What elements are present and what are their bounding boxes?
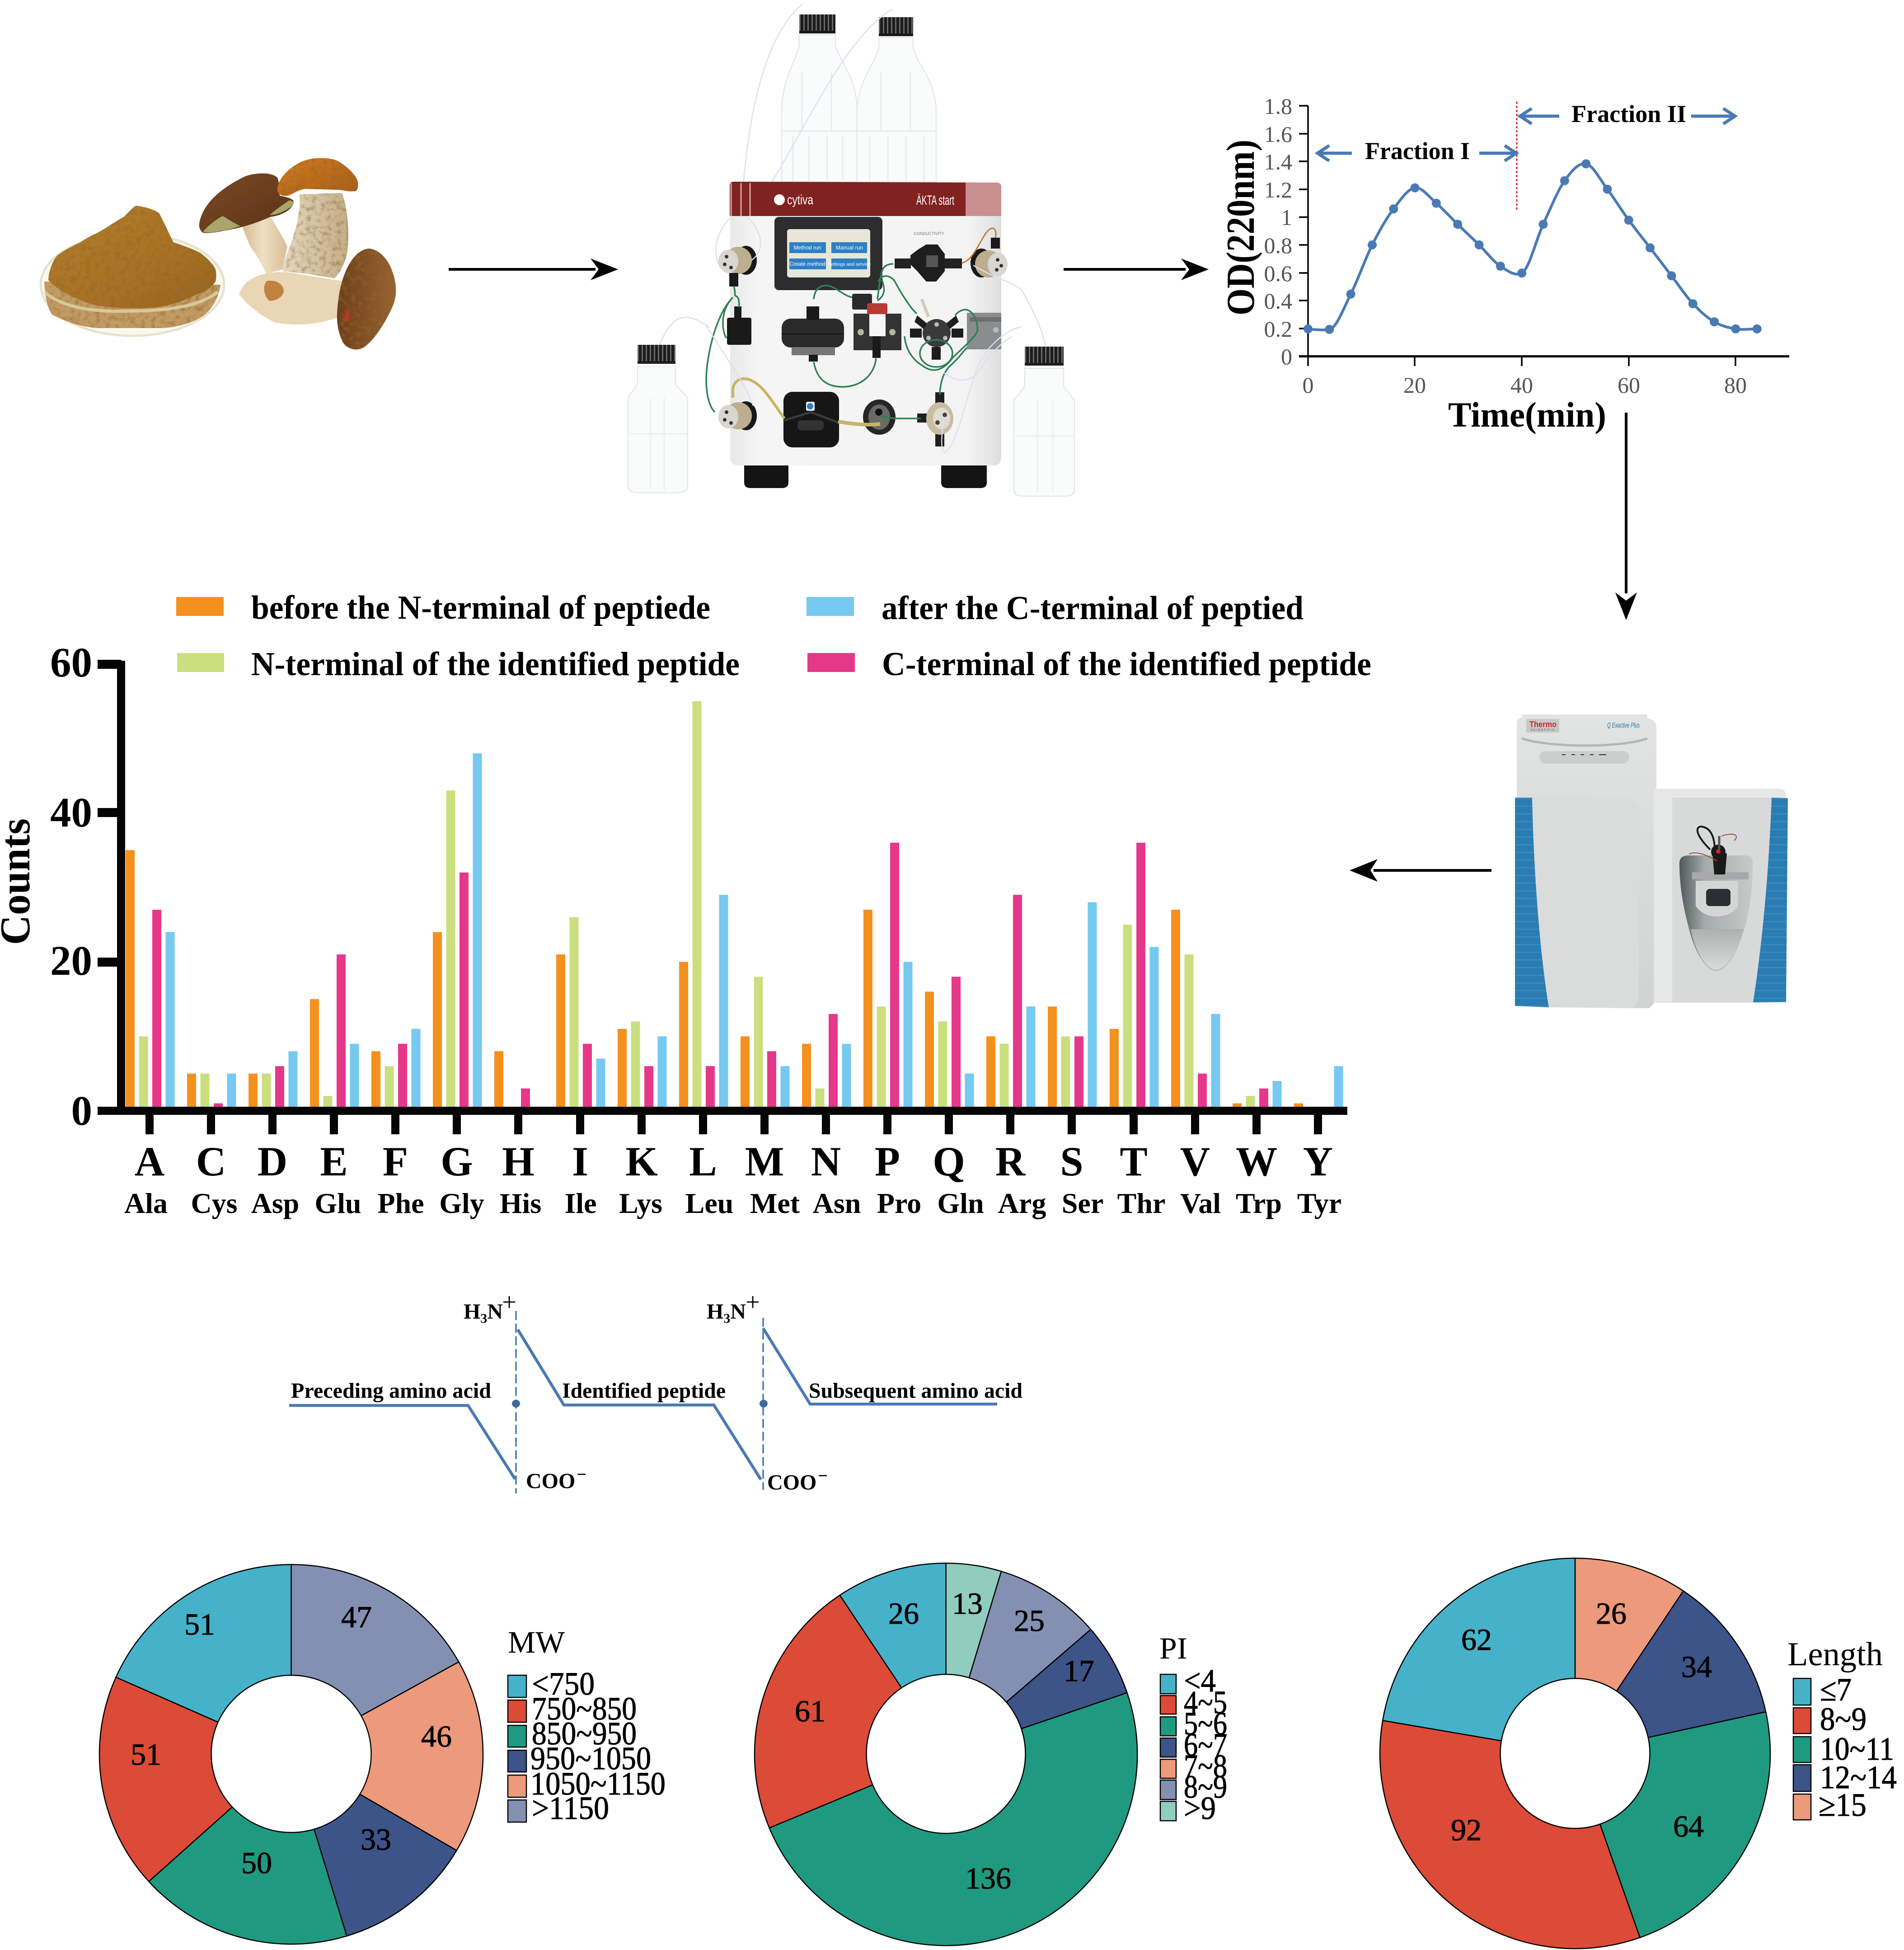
bars T — [1110, 843, 1158, 1111]
y-axis tick labels: 0.8 — [1264, 233, 1292, 258]
amino acid one-letter codes: P — [875, 1138, 900, 1184]
red speck — [344, 311, 350, 322]
valve: bottom left — [718, 401, 757, 430]
legend: after the C-terminal: after the C-terminal of peptied — [882, 590, 1304, 627]
legend text PI — [1184, 1663, 1227, 1826]
curve data points — [1304, 159, 1762, 334]
amino acid one-letter codes: Q — [933, 1138, 965, 1184]
right blue panel — [1753, 798, 1788, 1002]
legend title PI: PI — [1159, 1631, 1187, 1665]
amino acid one-letter codes: L — [689, 1138, 717, 1184]
legend text Length — [1819, 1672, 1897, 1823]
arrow: chromatography to elution profile — [1064, 258, 1209, 280]
foot right — [941, 465, 987, 488]
y-axis tick labels: 0 — [1281, 344, 1292, 369]
elution curve — [1308, 164, 1757, 330]
conductivity cell — [895, 231, 962, 282]
donut hole — [211, 1675, 371, 1833]
x-axis tick labels: 80 — [1724, 372, 1747, 398]
amino acid one-letter codes: H — [502, 1138, 535, 1184]
Length value labels: 92 — [1451, 1813, 1482, 1847]
y-axis tick labels: 1.6 — [1264, 122, 1292, 147]
bars P — [863, 843, 913, 1111]
fraction II arrows — [1520, 108, 1735, 124]
y-axis tick labels: 20 — [50, 938, 92, 984]
photo: mushroom powder in a dish — [41, 206, 224, 336]
chart: amino acid counts bars — [0, 639, 1347, 1219]
label: H3N+ left — [464, 1288, 516, 1326]
Length value labels: 26 — [1596, 1596, 1627, 1630]
y-axis tick labels: 1.2 — [1264, 177, 1292, 202]
amino acid three-letter codes: Lys — [619, 1187, 662, 1219]
MW value labels: 33 — [361, 1822, 391, 1856]
amino acid three-letter codes: Leu — [685, 1187, 733, 1219]
y-axis tick labels: 1.4 — [1264, 149, 1292, 174]
slice 26 — [1575, 1558, 1684, 1753]
legend: N-terminal of identified: N-terminal of the identified peptide — [251, 646, 740, 683]
PI value labels: 13 — [952, 1586, 983, 1621]
label: COO- right: − — [818, 1466, 828, 1485]
legend title Length: Length — [1787, 1636, 1883, 1673]
cleavage point left — [512, 1400, 520, 1407]
label: COO- right: COO — [767, 1471, 816, 1494]
status bar — [1539, 751, 1629, 764]
slice 46 — [291, 1662, 483, 1851]
legend text MW — [530, 1666, 666, 1826]
fraction I label: Fraction I — [1365, 137, 1470, 164]
amino acid one-letter codes: S — [1060, 1138, 1083, 1184]
legend swatches PI — [1160, 1674, 1176, 1821]
MW value labels: 50 — [241, 1846, 272, 1880]
legend text Length: 10~11 — [1820, 1731, 1894, 1767]
x-axis tick labels: 60 — [1618, 372, 1640, 398]
x-axis tick labels: 0 — [1302, 372, 1314, 398]
valve: top right — [971, 238, 1008, 277]
legend text PI: 6~7 — [1184, 1727, 1227, 1763]
pressure sensor — [863, 399, 896, 435]
legend text MW: <750 — [532, 1666, 595, 1702]
amino acid one-letter codes: T — [1120, 1138, 1148, 1184]
PI value labels: 61 — [795, 1694, 825, 1728]
legend text MW: >1150 — [532, 1790, 609, 1826]
amino acid three-letter codes: Gly — [439, 1187, 484, 1219]
valve: top left — [718, 246, 757, 287]
amino acid one-letter codes: N — [811, 1138, 841, 1184]
PI value labels: 25 — [1014, 1603, 1045, 1638]
label: COO- left: − — [577, 1465, 586, 1484]
bars Y — [1294, 1066, 1343, 1111]
model name: Q Exactive Plus — [1607, 722, 1640, 729]
fraction I arrows — [1318, 146, 1516, 161]
amino acid three-letter codes: Trp — [1236, 1187, 1282, 1219]
bars W — [1233, 1081, 1281, 1111]
label: H3N+ right — [707, 1288, 760, 1326]
cap underside: left mushroom — [203, 200, 294, 232]
red top band: ÄKTA start — [916, 193, 954, 208]
label: H3N+ right: N — [730, 1300, 746, 1324]
bars F — [371, 1029, 420, 1111]
left front panel — [1532, 798, 1639, 1008]
donut chart: Length — [1380, 1558, 1770, 1949]
conductivity cell: CONDUCTIVITY — [914, 231, 944, 236]
PI value labels: 26 — [888, 1596, 919, 1630]
y-axis tick labels: 40 — [50, 789, 92, 836]
legend text MW: 950~1050 — [530, 1740, 651, 1776]
bars V — [1171, 910, 1220, 1111]
amino acid three-letter codes: Arg — [998, 1187, 1046, 1219]
legend text MW: 750~850 — [532, 1691, 637, 1727]
red top band: cytiva — [787, 193, 813, 207]
ion source module — [1689, 827, 1749, 916]
PI value labels — [795, 1586, 1094, 1895]
slice 25 — [946, 1571, 1091, 1754]
y-axis tick labels: 0.2 — [1264, 316, 1292, 342]
y-axis tick labels: 1 — [1281, 205, 1292, 230]
left tower — [1515, 714, 1656, 1008]
slice 61 — [755, 1595, 946, 1828]
amino acid three-letter codes: Ala — [124, 1187, 168, 1219]
x-axis tick labels: 20 — [1403, 372, 1426, 398]
amino acid one-letter codes: F — [383, 1138, 408, 1184]
label: H3N+ right: H — [707, 1300, 723, 1324]
legend swatches MW — [508, 1675, 526, 1822]
legend: C-terminal of identified: C-terminal of the identified peptide — [882, 646, 1371, 683]
legend text Length: ≥15 — [1819, 1787, 1866, 1823]
legend text MW: 1050~1150 — [530, 1766, 666, 1802]
slice 13 — [946, 1563, 1001, 1754]
arrow: mushrooms to chromatography — [449, 258, 618, 280]
label: subsequent amino acid: Subsequent amino acid — [809, 1379, 1022, 1403]
y-axis title: OD(220nm) — [1219, 140, 1263, 315]
label: H3N+ right: 3 — [723, 1311, 730, 1326]
bars Q — [925, 977, 974, 1111]
cap: left mushroom — [199, 174, 294, 233]
fraction II label: Fraction II — [1571, 100, 1686, 127]
bars I — [556, 917, 605, 1111]
amino acid three-letter codes: Thr — [1117, 1187, 1165, 1219]
y-axis tick labels: 0.4 — [1264, 288, 1292, 314]
legend: Length — [1787, 1636, 1897, 1823]
amino acid one-letter codes: Y — [1303, 1138, 1333, 1184]
bars S — [1048, 902, 1097, 1111]
injection valve — [910, 299, 963, 360]
photo: Thermo Q Exactive Plus mass spectrometer — [1515, 714, 1788, 1008]
MW value labels: 47 — [341, 1600, 372, 1634]
slice 33 — [291, 1754, 457, 1936]
bars A — [126, 850, 174, 1111]
right cabinet — [1654, 789, 1786, 1003]
x-axis tick labels — [1302, 372, 1747, 398]
amino acid three-letter codes: Gln — [937, 1187, 984, 1219]
amino acid three-letter codes: Asn — [813, 1187, 861, 1219]
label: H3N+ left: + — [502, 1288, 516, 1316]
bars D — [249, 1051, 297, 1111]
reservoir bottles, top — [741, 5, 936, 217]
instrument body — [730, 214, 1001, 465]
cap: lying mushroom — [337, 249, 396, 349]
PI value labels: 17 — [1064, 1654, 1094, 1688]
bars G — [433, 753, 482, 1111]
y-axis tick labels: 0.6 — [1264, 261, 1292, 286]
bar chart axes — [98, 660, 1347, 1134]
arrow: mass spectrometer to bar chart — [1350, 859, 1491, 882]
cap: tall mushroom — [277, 158, 358, 196]
black block — [727, 306, 751, 345]
y-axis tick labels — [50, 639, 92, 1134]
MW value labels — [131, 1600, 452, 1880]
patch: lying stem — [264, 281, 284, 301]
legend text PI: 7~8 — [1184, 1748, 1227, 1784]
sample bottle left — [628, 345, 688, 493]
PI value labels: 136 — [965, 1861, 1011, 1895]
legend text Length: 12~14 — [1820, 1759, 1897, 1795]
legend text Length: 8~9 — [1820, 1701, 1866, 1737]
y-axis tick labels: 60 — [50, 639, 92, 686]
slice 51 red — [99, 1677, 291, 1881]
amino acid three-letter codes: Val — [1180, 1187, 1221, 1219]
stem: lying mushroom — [239, 272, 344, 324]
thermo logo — [1526, 719, 1559, 733]
legend text PI: 4~5 — [1184, 1684, 1227, 1720]
feet — [744, 465, 788, 488]
legend text Length: ≤7 — [1820, 1672, 1852, 1708]
amino acid one-letter codes: K — [625, 1138, 658, 1184]
Length value labels: 34 — [1681, 1649, 1712, 1684]
slice 17 — [946, 1630, 1127, 1754]
bars H — [494, 1051, 530, 1111]
amino acid one-letter codes: D — [258, 1138, 287, 1184]
amino acid one-letter codes — [135, 1138, 1333, 1184]
label: H3N+ left: N — [487, 1300, 503, 1324]
x-axis tick labels: 40 — [1510, 372, 1533, 398]
dashed cleavage lines — [516, 1311, 763, 1494]
slice 136 — [769, 1693, 1137, 1945]
peristaltic pump — [783, 392, 839, 447]
tubing — [655, 217, 1046, 452]
label: H3N+ left: 3 — [480, 1311, 487, 1326]
slice 26 — [840, 1563, 946, 1754]
amino acid three-letter codes: Asp — [251, 1187, 299, 1219]
MW value labels: 51 — [184, 1607, 215, 1641]
silver tray — [1691, 929, 1743, 970]
touch screen: Method run — [794, 244, 821, 251]
y-axis tick labels — [1264, 94, 1292, 369]
Length value labels — [1451, 1596, 1712, 1847]
label: H3N+ left: H — [464, 1300, 480, 1324]
bars C — [187, 1074, 236, 1111]
small black box — [852, 294, 872, 310]
axes — [1299, 106, 1789, 366]
slice 47 — [291, 1565, 459, 1754]
legend text PI: 5~6 — [1184, 1706, 1227, 1742]
right front panel — [1672, 798, 1772, 1002]
valve: bottom right — [917, 392, 953, 446]
amino acid three-letter codes — [124, 1187, 1341, 1219]
thermo logo: SCIENTIFIC — [1531, 729, 1555, 732]
amino acid one-letter codes: C — [196, 1138, 226, 1184]
donut chart: MW — [99, 1565, 483, 1944]
thermo logo: Thermo — [1529, 720, 1557, 729]
central black module — [782, 306, 844, 362]
touch screen: Settings and service — [828, 262, 871, 267]
legend: before the N-terminal: before the N-terminal of peptiede — [251, 589, 710, 626]
y-axis tick labels: 0 — [71, 1088, 92, 1134]
bars M — [741, 977, 790, 1111]
fraction divider — [1516, 102, 1517, 210]
slice 92 — [1380, 1720, 1640, 1949]
legend text MW: 850~950 — [532, 1715, 637, 1752]
bars K — [618, 1021, 667, 1111]
MW value labels: 46 — [421, 1719, 452, 1753]
slice 50 — [149, 1754, 347, 1944]
red top band — [730, 182, 1001, 216]
diagram: peptide termini schematic — [289, 1288, 1022, 1494]
photo: AKTA start chromatography system — [628, 5, 1074, 496]
slice 62 — [1383, 1558, 1575, 1753]
amino acid one-letter codes: G — [441, 1138, 473, 1184]
cleavage point right — [760, 1400, 768, 1407]
amino acid three-letter codes: Phe — [377, 1187, 424, 1219]
bars L — [679, 701, 728, 1111]
legend text PI: 8~9 — [1184, 1769, 1227, 1805]
donut chart: PI — [755, 1563, 1137, 1945]
touch screen: Manual run — [836, 244, 863, 251]
amino acid one-letter codes: V — [1180, 1138, 1210, 1184]
amino acid three-letter codes: Pro — [877, 1187, 921, 1219]
label: preceding amino acid: Preceding amino acid — [291, 1379, 491, 1403]
legend: PI — [1159, 1631, 1227, 1826]
amino acid one-letter codes: M — [745, 1138, 784, 1184]
label: H3N+ right: + — [746, 1288, 760, 1316]
amino acid three-letter codes: Met — [750, 1187, 800, 1219]
MW value labels: 51 — [131, 1737, 161, 1771]
legend: MW — [508, 1625, 666, 1826]
Length value labels: 62 — [1461, 1622, 1492, 1657]
slice 51 blue — [116, 1565, 291, 1754]
bars N — [802, 1014, 851, 1111]
x-axis title: Time(min) — [1448, 395, 1606, 434]
amino acid three-letter codes: Ser — [1062, 1187, 1103, 1219]
amino acid three-letter codes: Tyr — [1297, 1187, 1341, 1219]
y-axis tick labels: 1.8 — [1264, 94, 1292, 119]
left blue panel — [1515, 798, 1549, 1007]
grey bracket — [967, 313, 1001, 349]
legend title MW: MW — [508, 1625, 565, 1659]
amino acid one-letter codes: I — [572, 1138, 588, 1184]
amino acid one-letter codes: W — [1236, 1138, 1277, 1184]
stem: tall mushroom — [282, 193, 348, 278]
amino acid three-letter codes: Glu — [314, 1187, 361, 1219]
label: COO- left: COO — [526, 1469, 575, 1493]
bars R — [986, 895, 1036, 1111]
amino acid one-letter codes: A — [135, 1138, 164, 1184]
sample bottle right — [1014, 347, 1074, 496]
amino acid three-letter codes: Ile — [564, 1187, 597, 1219]
arrow: elution profile to mass spectrometer — [1615, 413, 1637, 620]
touch screen: Create method — [789, 261, 825, 267]
UV monitor and bracket — [854, 303, 901, 358]
legend: bar chart terminals — [176, 589, 1371, 683]
lid edge — [1522, 738, 1647, 746]
amino acid one-letter codes: R — [995, 1138, 1026, 1184]
bars E — [310, 954, 359, 1111]
label: identified peptide: Identified peptide — [562, 1379, 726, 1403]
ion source opening — [1679, 855, 1753, 971]
stem: left mushroom — [239, 211, 287, 274]
amino acid three-letter codes: Cys — [191, 1187, 238, 1219]
peptide backbone lines — [289, 1328, 997, 1480]
touch screen — [774, 217, 882, 290]
slice 34 — [1575, 1591, 1766, 1753]
photo: boletus mushrooms — [199, 158, 396, 349]
amino acid one-letter codes: E — [320, 1138, 348, 1184]
chart: elution profile OD220 — [1219, 94, 1789, 434]
legend swatches Length — [1793, 1678, 1811, 1820]
legend text PI: <4 — [1184, 1663, 1216, 1699]
Length value labels: 64 — [1673, 1809, 1704, 1843]
legend text PI: >9 — [1184, 1790, 1216, 1826]
donut hole — [867, 1674, 1026, 1833]
slice 64 — [1575, 1712, 1770, 1937]
amino acid three-letter codes: His — [500, 1187, 541, 1219]
donut hole — [1500, 1678, 1650, 1828]
